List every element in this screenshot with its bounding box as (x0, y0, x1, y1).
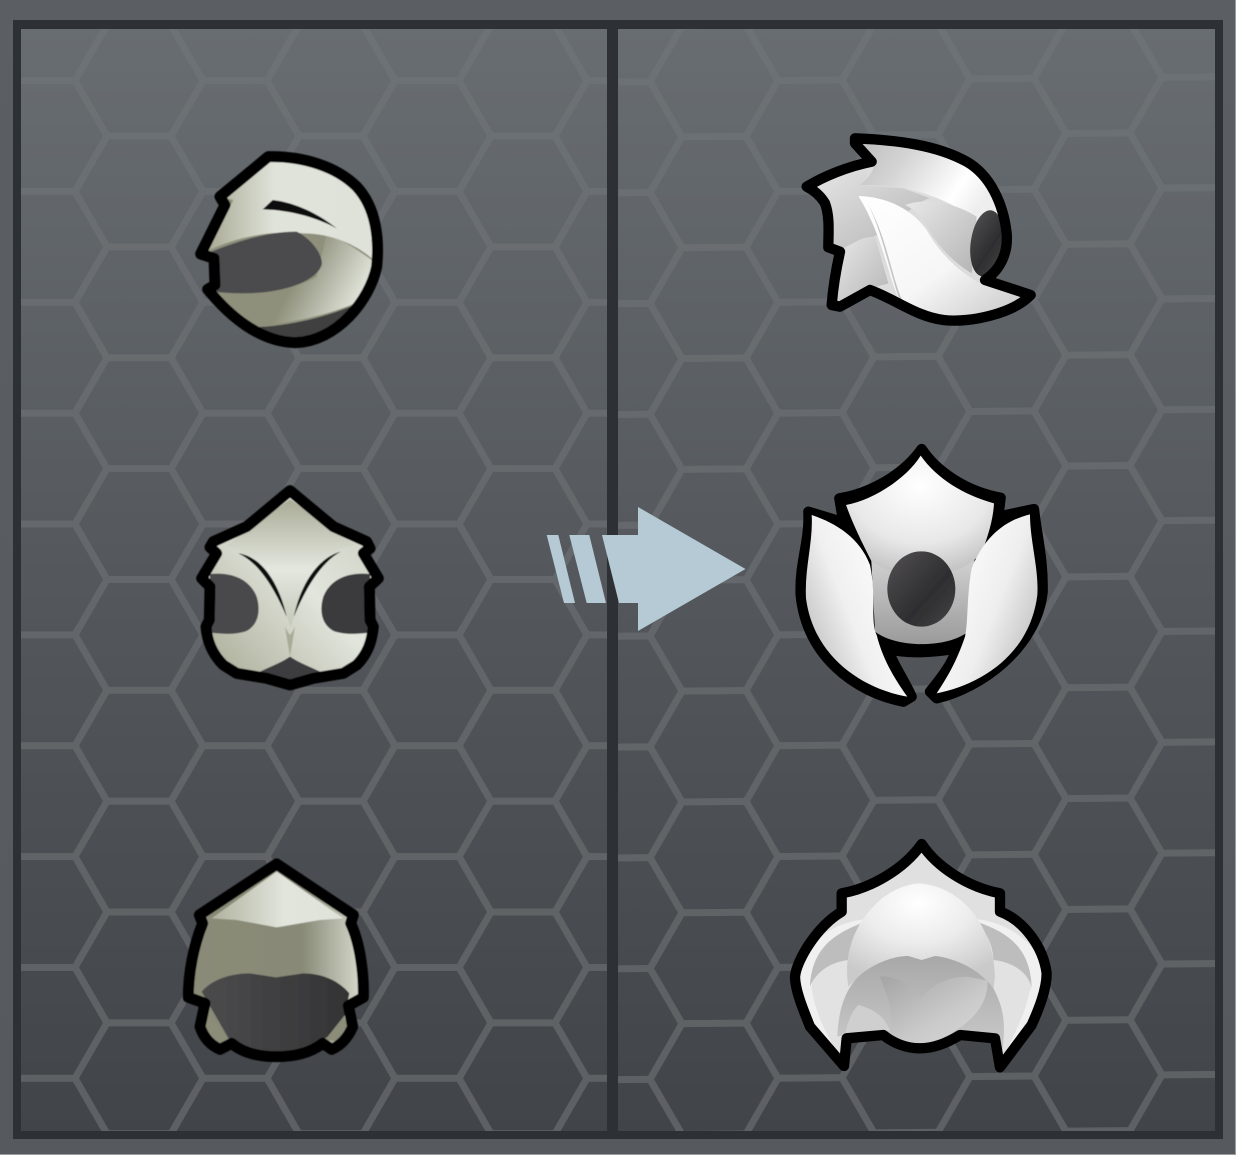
panel: right, after (618, 29, 1215, 1131)
icon: before creature 2, front view (202, 491, 378, 685)
arrow: before to after (547, 507, 746, 631)
icon: before creature 1, side view (201, 157, 378, 343)
panel: left, before (21, 29, 607, 1131)
icon: after creature 1, side view (807, 138, 1032, 321)
icon: after creature 3, back view (795, 844, 1047, 1067)
icon: after creature 2, front view (801, 449, 1043, 702)
icon: before creature 3, back view (188, 864, 363, 1057)
